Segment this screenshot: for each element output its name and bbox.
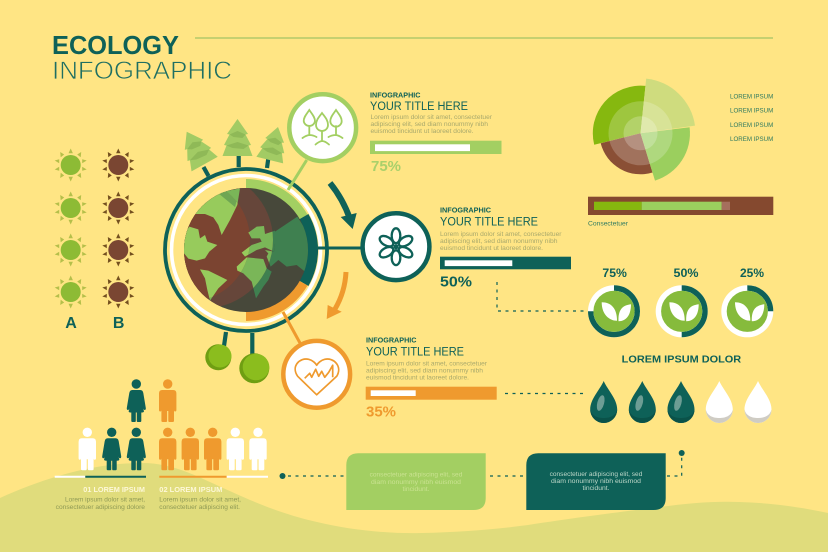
title line 2: INFOGRAPHIC xyxy=(52,57,232,85)
green balls xyxy=(205,332,269,383)
caption 01: Lorem ipsum dolor sit amet, xyxy=(65,497,145,504)
caption 02: consectetuer adipiscing elit. xyxy=(159,504,240,511)
people group 1 xyxy=(79,379,146,470)
sun comparison xyxy=(55,148,134,332)
teal text box: diam nonummy nibh euismod xyxy=(551,478,642,485)
label A: A xyxy=(65,315,77,332)
body text: euismod tincidunt ut laoreet dolore. xyxy=(370,128,474,135)
icon circle: trees xyxy=(289,94,356,161)
value 50: 50% xyxy=(440,274,472,291)
green text box: tincidunt. xyxy=(402,486,430,493)
chart legend: LOREM IPSUM xyxy=(730,136,773,143)
body text: Lorem ipsum dolor sit amet, consectetuer xyxy=(366,361,487,368)
heading: lorem ipsum dolor: LOREM IPSUM DOLOR xyxy=(622,354,742,366)
arrow: teal xyxy=(330,183,357,229)
chart legend xyxy=(730,94,773,143)
kicker: INFOGRAPHIC xyxy=(370,92,420,99)
ratio line 1 xyxy=(55,476,146,478)
body text: Lorem ipsum dolor sit amet, consectetuer xyxy=(370,114,492,121)
heading: YOUR TITLE HERE xyxy=(366,347,464,359)
text block 2 xyxy=(440,208,571,291)
caption 02 xyxy=(159,487,241,511)
people chart xyxy=(55,379,268,477)
body text: Lorem ipsum dolor sit amet, consectetuer xyxy=(440,231,562,238)
progress bar 75 xyxy=(370,141,502,154)
white ring xyxy=(172,176,320,324)
sector: teal xyxy=(246,214,318,286)
sector: orange xyxy=(246,250,308,321)
column A suns xyxy=(55,148,87,308)
bottom hills xyxy=(0,463,828,552)
chart legend: LOREM IPSUM xyxy=(730,108,773,115)
teal text box: consectetuer adipiscing elit, sed xyxy=(550,471,643,478)
icon circle: heart xyxy=(283,341,350,408)
people group 2 xyxy=(159,379,267,470)
label B: B xyxy=(113,315,124,332)
text block 3 xyxy=(366,338,497,421)
caption 01: 01 LOREM IPSUM xyxy=(83,487,145,494)
timeline start dot xyxy=(280,473,286,479)
icon: trees on globe xyxy=(174,119,291,176)
heading: YOUR TITLE HERE xyxy=(440,217,538,229)
column B suns xyxy=(102,148,134,308)
donut 75 xyxy=(588,266,640,337)
icon circle: flower xyxy=(363,213,429,280)
body text: euismod tincidunt ut laoreet dolore. xyxy=(440,245,543,252)
caption 01 xyxy=(56,487,146,511)
outer ring xyxy=(165,169,327,331)
progress bar 50 xyxy=(440,257,571,269)
timeline end dot xyxy=(679,450,685,456)
kicker: INFOGRAPHIC xyxy=(366,338,416,345)
body text: euismod tincidunt ut laoreet dolore. xyxy=(366,375,469,382)
globe map xyxy=(184,188,308,312)
donut 25 xyxy=(721,266,773,337)
percent label: 75% xyxy=(602,266,627,280)
title xyxy=(52,30,232,85)
body text: adipiscing elit, sed diam nonummy nibh xyxy=(366,368,484,375)
teal text box: tincidunt. xyxy=(582,485,610,492)
ratio line 2 xyxy=(159,476,268,478)
kicker: INFOGRAPHIC xyxy=(440,208,491,215)
teal text box xyxy=(526,453,666,510)
body text: adipiscing elit, sed diam nonummy nibh xyxy=(440,238,558,245)
heading: YOUR TITLE HERE xyxy=(370,101,468,113)
body text: adipiscing elit, sed diam nonummy nibh xyxy=(370,121,489,128)
green text box: diam nonummy nibh euismod xyxy=(371,479,462,486)
caption 02: 02 LOREM IPSUM xyxy=(159,487,222,494)
green text box xyxy=(346,453,486,510)
globe with rings xyxy=(163,167,329,333)
connector lines xyxy=(283,160,363,343)
chart legend: LOREM IPSUM xyxy=(730,94,773,101)
percent label: 50% xyxy=(674,266,699,280)
value 35: 35% xyxy=(366,404,396,421)
green text box: consectetuer adipiscing elit, sed xyxy=(370,472,463,479)
value 75: 75% xyxy=(371,158,401,175)
arrow: orange xyxy=(327,272,346,319)
dashed connectors xyxy=(288,282,682,476)
sector: green xyxy=(246,179,308,250)
caption 01: consectetuer adipiscing dolore xyxy=(56,504,146,511)
chart legend: LOREM IPSUM xyxy=(730,122,773,129)
progress bar 35 xyxy=(366,387,497,400)
body text xyxy=(366,361,487,382)
percent label: 25% xyxy=(740,266,764,280)
donut 50 xyxy=(656,266,708,337)
body text xyxy=(440,231,562,252)
polar area chart xyxy=(593,79,695,181)
caption 02: Lorem ipsum dolor sit amet, xyxy=(159,497,241,504)
stacked bar xyxy=(588,197,773,215)
body text xyxy=(370,114,492,135)
title line 1: ECOLOGY xyxy=(52,30,179,60)
bar caption: Consectetuer xyxy=(588,221,629,228)
water drops xyxy=(590,381,772,423)
text block 1 xyxy=(370,92,502,175)
